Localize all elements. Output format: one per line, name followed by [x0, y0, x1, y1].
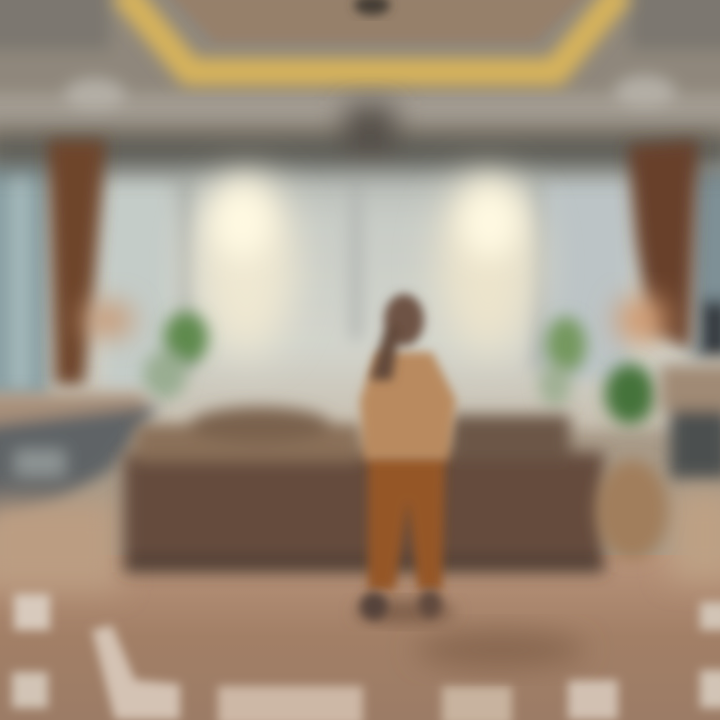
dark beam below ceiling: [0, 105, 720, 168]
person torso: [360, 352, 456, 460]
person: [355, 294, 456, 624]
spotlight hot spots: [212, 186, 520, 258]
plants: [143, 312, 655, 424]
planter pot: [596, 460, 668, 560]
person shadow: [355, 600, 455, 624]
curtains: [48, 140, 698, 385]
floor shadow: [415, 632, 585, 668]
ceiling: [0, 0, 720, 128]
person feet: [360, 590, 442, 620]
person legs: [368, 455, 445, 590]
ceiling fixture: [354, 0, 390, 15]
floor: [0, 490, 720, 720]
person head: [370, 294, 424, 380]
wall lamps: [82, 296, 668, 344]
sofa: [124, 407, 604, 572]
ceiling inner panel: [165, 0, 590, 42]
ceiling gold light cove: [122, 0, 622, 72]
floor reflections: [12, 594, 720, 720]
side tables: [0, 365, 720, 530]
wall: [0, 150, 720, 430]
wall spotlights: [196, 175, 538, 355]
